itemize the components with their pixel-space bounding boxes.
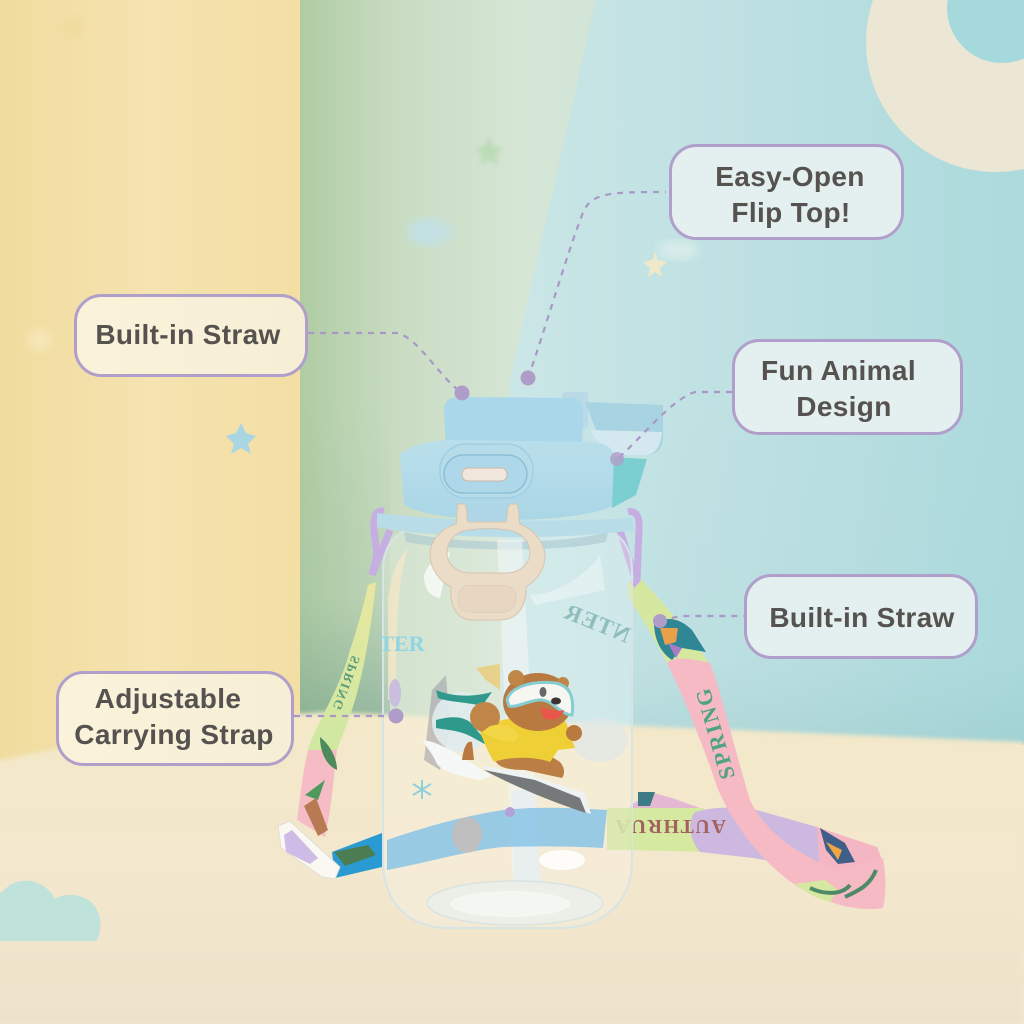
background wall: blue panel [500, 0, 1024, 745]
strap print: autumn: AUTHRUA [614, 815, 726, 837]
bottle collar [377, 513, 634, 537]
decoration: blurred star [408, 218, 452, 246]
decoration: faint yellow star [60, 16, 84, 38]
print: winter mirrored: NTER [560, 598, 634, 648]
bottle neck ring [404, 532, 608, 550]
band print: figure [452, 817, 482, 853]
print: ter front: TER [379, 631, 426, 656]
callout: fun animal design: Fun Animal [761, 355, 916, 386]
callout: adjustable carrying strap: Carrying Strap [74, 719, 274, 750]
bear head [503, 673, 573, 731]
callout: built-in straw left: Built-in Straw [95, 319, 281, 350]
strap print: left word: SPRING [329, 654, 363, 713]
bear nose [551, 698, 561, 704]
bottle base ring [427, 881, 603, 925]
callout: built-in straw right: Built-in Straw [769, 602, 955, 633]
bear shirt [480, 716, 575, 762]
floor [0, 712, 1024, 1024]
lid: spout [610, 457, 647, 508]
handle: lower tab fill [458, 586, 516, 612]
callout: fun animal design: Design [796, 391, 892, 422]
decoration: cloud [0, 881, 100, 941]
green panel shade [300, 400, 390, 730]
bottle base white blob [539, 850, 585, 870]
strap art: teal bird [654, 619, 706, 660]
lid: flip cap back [585, 402, 663, 455]
strap word: spring: SPRING [690, 684, 740, 782]
callout: easy-open flip top: Flip Top! [731, 197, 851, 228]
blue panel shade [630, 400, 1024, 745]
strap art: upper bird [638, 792, 655, 806]
lid: latch rim [440, 444, 533, 498]
print: snow tree [432, 692, 492, 752]
lid: main [400, 440, 614, 520]
lid: flip cap underside [590, 430, 662, 455]
lid: upper [444, 397, 583, 450]
callout: fun animal design [610, 340, 962, 466]
bear arm [470, 702, 500, 732]
print: lilac snowflake [505, 807, 515, 817]
bear back foot [462, 742, 474, 760]
bear goggles [507, 682, 573, 715]
straw [497, 540, 540, 883]
lid: latch pill [462, 468, 507, 481]
decoration: green star [475, 136, 503, 165]
bear right paw [566, 725, 582, 741]
strap buckle [278, 821, 340, 879]
strap lime patch [795, 880, 838, 902]
strap art: green leaf [320, 737, 337, 770]
print: right snow cloud [572, 718, 628, 762]
strap band: lower left end [332, 833, 382, 878]
print: snowboard [480, 765, 591, 814]
strap lugs [372, 511, 639, 585]
strap art: orange bird [820, 828, 855, 864]
handle: loop [430, 504, 545, 620]
print: lilac tree shadow [424, 675, 450, 770]
bottle right highlight [530, 555, 605, 605]
decoration: cream ring [866, 0, 1024, 172]
background wall: green panel [300, 0, 620, 730]
decoration: cream star [643, 252, 667, 277]
bottle shoulder highlight [424, 552, 450, 598]
lid: small hinge tab [562, 392, 588, 428]
lid: latch button [444, 455, 527, 493]
buckle insert [284, 830, 318, 864]
decoration: faint pale star [28, 329, 52, 351]
print: teal snowflake [413, 780, 431, 799]
callout: adjustable carrying strap [58, 672, 404, 764]
print: yellow patch [476, 664, 500, 690]
bottle inner band print [387, 808, 607, 870]
bear legs [495, 753, 564, 778]
lid: hinge [466, 503, 510, 521]
strap: left band [278, 582, 382, 879]
strap art: lower left print [334, 845, 376, 866]
callout: adjustable carrying strap: Adjustable [95, 683, 241, 714]
strap art: leaves [810, 870, 876, 897]
straw lower [511, 790, 541, 883]
callout: built-in straw right [653, 576, 976, 658]
strap: right band [628, 578, 886, 909]
bear [462, 670, 582, 778]
bear ears [508, 670, 569, 689]
callout: easy-open flip top: Easy-Open [715, 161, 865, 192]
bottle left cream stripe [388, 548, 408, 700]
background wall: yellow panel [0, 0, 300, 790]
callout: easy-open flip top [520, 146, 902, 386]
print: pine branches [436, 690, 492, 748]
callout: built-in straw left [76, 296, 470, 400]
decoration: blurred glow [658, 240, 698, 260]
bottle base centre [450, 891, 570, 917]
bottle inner lime band [607, 808, 632, 850]
bear mouth [540, 707, 564, 720]
bear eye [540, 687, 546, 697]
print: snow spray [423, 740, 492, 780]
strap: back loop on floor [614, 792, 885, 905]
bottle body [383, 530, 632, 928]
decoration: blue star [226, 423, 256, 454]
strap art: left leaf and bird [304, 780, 328, 836]
print: lilac flake [389, 679, 401, 707]
bear sleeve [482, 725, 518, 742]
